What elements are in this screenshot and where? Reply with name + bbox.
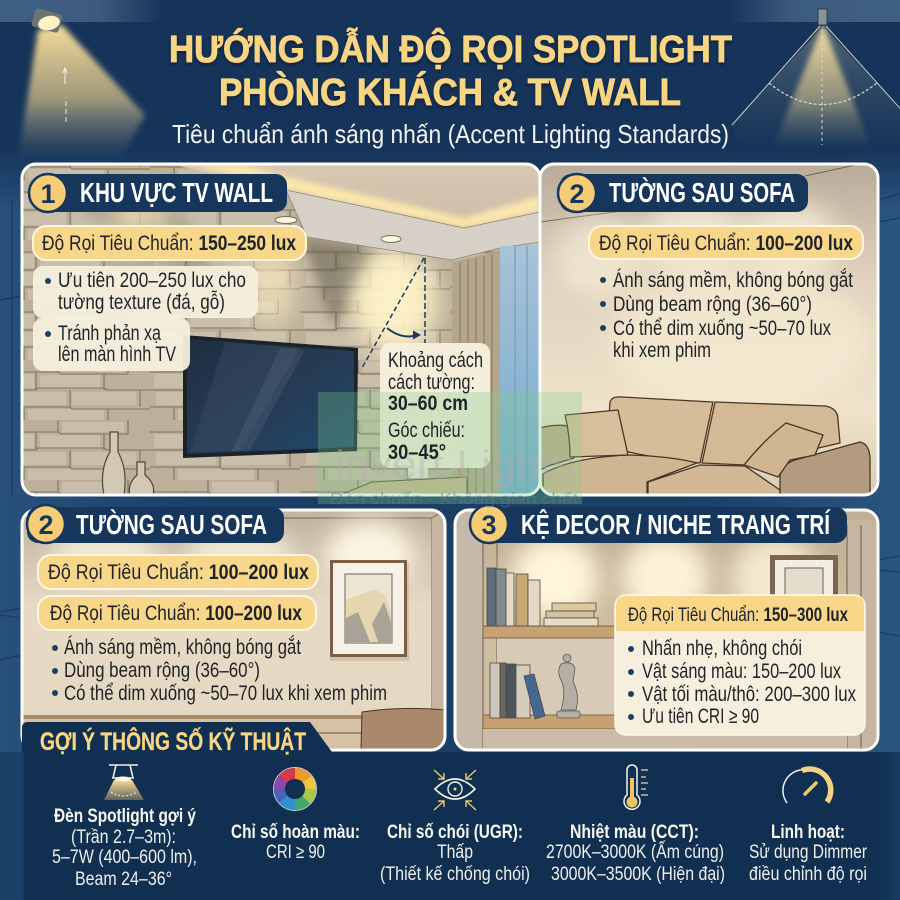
bullet list: Ánh sáng mềm, không bóng gắt <box>64 636 301 659</box>
callout text: distance and angle: cách tường: <box>388 371 475 394</box>
lux badge: Độ Rọi Tiêu Chuẩn: 150–250 lux <box>42 232 296 255</box>
stone wall <box>22 164 540 495</box>
heading badge: 2 <box>558 174 808 212</box>
spec: spotlight: Beam 24–36° <box>75 869 172 890</box>
spec: UGR: Thấp <box>437 842 473 863</box>
icon: dimmer gauge <box>783 769 831 803</box>
spec: UGR: Chỉ số chói (UGR): <box>387 822 523 843</box>
heading badge: 2 <box>27 505 284 543</box>
note: texture wall: tường texture (đá, gỗ) <box>58 291 225 314</box>
watermark: invert Lights <box>335 443 575 487</box>
info card: Độ Rọi Tiêu Chuẩn: 150–300 lux <box>628 605 848 626</box>
sofa <box>540 397 870 495</box>
heading badge: 2: TƯỜNG SAU SOFA <box>609 177 795 208</box>
callout text: distance and angle: 30–45° <box>388 441 446 464</box>
info card: Ưu tiên CRI ≥ 90 <box>642 705 759 728</box>
bullet list: Có thể dim xuống ~50–70 lux <box>613 317 831 340</box>
icon: thermometer <box>624 765 648 809</box>
spec: CRI <box>231 822 360 863</box>
callout text: distance and angle <box>388 349 483 464</box>
lux badge <box>38 555 318 589</box>
spec: UGR <box>380 822 530 885</box>
heading badge: 1: KHU VỰC TV WALL <box>80 177 273 208</box>
callout text: distance and angle: Khoảng cách <box>388 349 483 372</box>
note: texture wall <box>33 266 258 318</box>
lux badge <box>33 226 306 260</box>
title: PHÒNG KHÁCH & TV WALL <box>219 70 681 114</box>
spec: CRI: Chỉ số hoàn màu: <box>231 822 360 843</box>
spec: dimmer: Sử dụng Dimmer <box>749 842 868 863</box>
spec: CRI: CRI ≥ 90 <box>266 842 325 863</box>
callout box: distance and angle <box>380 343 490 468</box>
callout text: distance and angle: 30–60 cm <box>388 392 468 415</box>
title: HƯỚNG DẪN ĐỘ RỌI SPOTLIGHT <box>169 26 732 71</box>
spec: CCT: Nhiệt màu (CCT): <box>570 822 699 843</box>
watermark: Đèn chuẩn - Không gian chất <box>330 490 579 508</box>
info card: Vật sáng màu: 150–200 lux <box>642 660 841 683</box>
vases <box>102 432 154 495</box>
bullet list <box>52 636 387 705</box>
wainscot <box>24 715 362 748</box>
info card <box>615 595 865 735</box>
spec: dimmer: điều chỉnh độ rọi <box>749 864 867 885</box>
icon: right ceiling spotlight with beam angle <box>732 9 900 150</box>
note: texture wall: Ưu tiên 200–250 lux cho <box>58 269 246 292</box>
spec: CCT: 3000K–3500K (Hiện đại) <box>551 864 725 885</box>
lux badge: Độ Rọi Tiêu Chuẩn: 100–200 lux <box>48 561 309 584</box>
spec: UGR: (Thiết kế chống chói) <box>380 864 530 885</box>
subtitle: Tiêu chuẩn ánh sáng nhấn (Accent Lighting Standards) <box>172 119 729 149</box>
bullet list <box>600 269 853 362</box>
books <box>487 568 598 719</box>
title <box>169 26 732 114</box>
icon: recessed lights <box>275 216 401 242</box>
TV <box>183 335 358 458</box>
chair <box>361 708 445 750</box>
icon: spotlight <box>104 765 144 800</box>
lux badge <box>589 226 863 259</box>
info card: Nhấn nhẹ, không chói <box>642 637 802 660</box>
shelves <box>483 626 847 750</box>
bullet list: Dùng beam rộng (36–60°) <box>613 293 812 316</box>
heading badge: 2: 2 <box>38 510 54 540</box>
panel: technical specs footer <box>0 722 900 900</box>
callout text: distance and angle: Góc chiếu: <box>388 419 465 442</box>
framed art <box>770 555 838 594</box>
lux badge: Độ Rọi Tiêu Chuẩn: 100–200 lux <box>50 602 302 625</box>
spec: spotlight: Đèn Spotlight gợi ý <box>54 806 196 827</box>
bullet list: Dùng beam rộng (36–60°) <box>64 659 260 682</box>
lux badge <box>38 596 316 630</box>
spec: CCT <box>546 822 725 885</box>
heading badge: 2: TƯỜNG SAU SOFA <box>76 509 267 540</box>
heading badge: 2: 2 <box>569 179 585 209</box>
heading: technical specs: GỢI Ý THÔNG SỐ KỸ THUẬT <box>40 726 306 756</box>
spec: dimmer <box>749 822 868 885</box>
diagram: beam angle lines <box>362 258 425 368</box>
spec: spotlight: 5–7W (400–600 lm), <box>52 847 197 868</box>
heading badge: 3 <box>470 505 847 543</box>
spec: spotlight: (Trần 2.7–3m): <box>71 827 176 848</box>
lux badge: Độ Rọi Tiêu Chuẩn: 100–200 lux <box>599 232 853 255</box>
note: avoid reflection <box>33 318 190 371</box>
heading badge: 1: 1 <box>40 179 56 209</box>
icon: colour wheel <box>274 768 316 810</box>
note: avoid reflection: Tránh phản xạ <box>58 322 161 345</box>
panel: TV wall <box>22 164 540 495</box>
ceiling <box>170 164 540 260</box>
note: avoid reflection: lên màn hình TV <box>58 343 176 366</box>
spec: spotlight <box>52 806 197 890</box>
bullet list: Có thể dim xuống ~50–70 lux khi xem phim <box>64 682 387 705</box>
console with vase <box>342 468 468 494</box>
icon: anti-glare eye <box>434 770 476 810</box>
watermark <box>318 392 582 508</box>
statue <box>557 654 580 718</box>
icon: framed picture <box>330 560 409 661</box>
bullet list: khi xem phim <box>613 339 711 362</box>
panel: sofa wall lower left <box>22 505 445 750</box>
panel: sofa wall top right <box>540 164 878 495</box>
curtain and window <box>452 246 540 495</box>
spec: dimmer: Linh hoạt: <box>771 822 845 843</box>
heading badge: 1 <box>29 174 287 212</box>
spec: CCT: 2700K–3000K (Ấm cúng) <box>546 841 724 863</box>
panel: decor shelf <box>455 505 878 750</box>
heading badge: 3: 3 <box>481 510 497 540</box>
icon: left tilted spotlight with beam <box>18 8 145 160</box>
